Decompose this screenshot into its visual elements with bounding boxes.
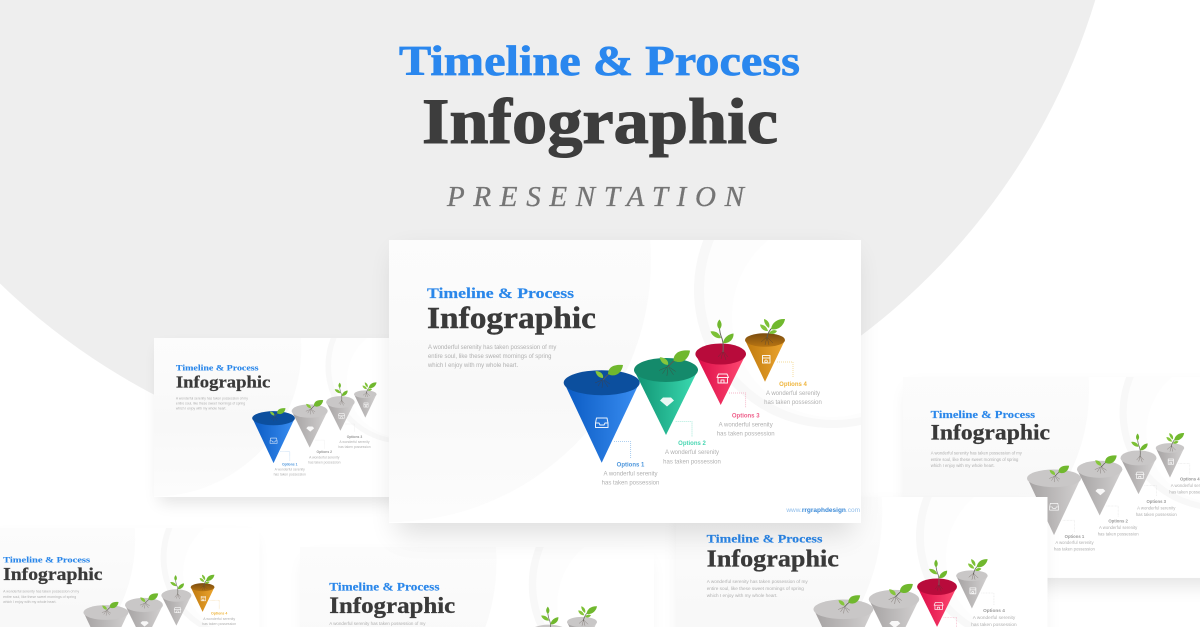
red cone with plant	[695, 320, 746, 405]
option 1 callout: A wonderful serenity	[603, 472, 658, 478]
panel: right slide preview: Timeline & Process	[931, 410, 1035, 421]
panel: left slide preview: A wonderful serenity	[275, 467, 305, 471]
slide shadow	[397, 254, 853, 534]
panel: bottom-right slide preview: Infographic	[707, 546, 839, 572]
orange cone with plant	[745, 319, 785, 382]
panel: left slide preview: Options 2	[317, 450, 332, 454]
slide title: Timeline & Process	[427, 286, 574, 302]
panel: right slide preview: Options 3	[1146, 499, 1167, 504]
panel: bottom-left slide preview: entire soul, like these sweet mornings of spring	[3, 595, 76, 599]
panel: bottom-centre slide preview: A wonderful serenity has taken possession of my	[329, 621, 426, 626]
panel: bottom-left slide preview: Options 4	[211, 611, 227, 615]
panel: right slide preview: A wonderful serenity	[1099, 525, 1138, 530]
panel: left slide preview: has taken possession	[308, 461, 341, 465]
panel: bottom-left slide preview: Timeline & Process	[3, 554, 91, 564]
option 1 callout	[602, 442, 659, 486]
green cone with plant	[634, 350, 698, 435]
slide body text	[427, 345, 556, 369]
option 3 callout: has taken possession	[717, 432, 775, 438]
slide body text: A wonderful serenity has taken possession of my	[428, 345, 556, 351]
panel: bottom-right slide preview	[470, 307, 1133, 627]
option 4 callout: A wonderful serenity	[766, 391, 820, 397]
panel: bottom-centre slide preview: Timeline & Process	[329, 582, 440, 594]
option 4 callout	[764, 362, 822, 406]
panel: left slide preview: Timeline & Process	[176, 363, 259, 373]
slide body text: entire soul, like these sweet mornings of spring	[428, 354, 551, 360]
option 2 callout: Options 2	[678, 441, 706, 447]
slide background	[127, 0, 970, 523]
panel: bottom-left slide preview: Infographic	[3, 564, 103, 584]
panel: left slide preview: A wonderful serenity has taken possession of my	[176, 396, 248, 400]
panel: left slide preview: Options 3	[347, 435, 362, 439]
panel: bottom-left slide preview: A wonderful serenity has taken possession of my	[3, 590, 79, 594]
panel: right slide preview: A wonderful serenity has taken possession of my	[931, 450, 1023, 455]
panel: left slide preview: has taken possession	[274, 472, 306, 476]
panel: left slide preview: Options 1	[282, 462, 298, 466]
subheading: Presentation: PRESENTATION	[446, 181, 746, 213]
heading: Timeline & Process: Timeline & Process	[399, 39, 800, 85]
option 2 callout: A wonderful serenity	[665, 450, 719, 456]
option 3 callout: A wonderful serenity	[719, 422, 773, 428]
panel: bottom-right slide preview: Options 4	[983, 608, 1005, 614]
blue cone with plant	[564, 365, 640, 463]
panel: right slide preview: Options 4	[1180, 477, 1200, 482]
panel: bottom-right slide preview: A wonderful serenity	[973, 615, 1016, 621]
panel: left slide preview: has taken possession	[338, 445, 371, 449]
panel: right slide preview: A wonderful serenity	[1137, 505, 1176, 510]
heading: Infographic: Infographic	[422, 86, 778, 158]
panel: right slide preview: which I enjoy with my whole heart.	[931, 463, 995, 468]
panel: right slide preview: Options 1	[1065, 534, 1085, 539]
website url: www.rrgraphdesign.com	[785, 507, 860, 514]
panel: bottom-centre slide preview: Infographic	[329, 593, 455, 618]
large grey background circle	[0, 0, 1124, 470]
panel: bottom-left slide preview	[0, 385, 324, 627]
option 1 callout: Options 1	[617, 463, 645, 469]
panel: bottom-left slide preview: which I enjoy with my whole heart.	[3, 600, 56, 604]
panel: bottom-right slide preview: A wonderful serenity has taken possession of my	[707, 579, 808, 584]
panel: right slide preview: entire soul, like these sweet mornings of spring	[931, 457, 1019, 462]
panel: main slide preview	[127, 0, 970, 534]
panel: bottom-right slide preview: Timeline & Process	[707, 532, 823, 546]
panel: left slide preview: Infographic	[176, 372, 271, 391]
option 2 callout	[663, 422, 721, 466]
panel: bottom-left slide preview: A wonderful serenity	[203, 617, 235, 621]
slide body text: which I enjoy with my whole heart.	[427, 363, 518, 369]
panel: bottom-right slide preview: which I enjoy with my whole heart.	[707, 593, 778, 598]
panel: left slide preview: which I enjoy with my whole heart.	[176, 406, 226, 410]
panel: right slide preview: has taken possession	[1136, 512, 1177, 517]
option 1 callout: has taken possession	[602, 480, 659, 486]
option 4 callout: Options 4	[779, 382, 807, 388]
option 4 callout: has taken possession	[764, 400, 822, 406]
panel: left slide preview	[7, 202, 481, 503]
panel: left slide preview: entire soul, like these sweet mornings of spring	[176, 401, 245, 405]
panel: right slide preview: has taken possession	[1098, 532, 1139, 537]
option 3 callout	[717, 393, 775, 438]
panel: right slide preview: A wonderful serenity	[1055, 540, 1094, 545]
panel: right slide preview: has taken possession	[1054, 547, 1096, 552]
panel: bottom-centre slide preview	[104, 366, 736, 627]
option 3 callout: Options 3	[732, 414, 760, 420]
slide heading: Infographic	[427, 301, 596, 335]
panel: left slide preview: A wonderful serenity	[309, 455, 340, 459]
panel: right slide preview	[717, 205, 1200, 585]
panel: right slide preview: Infographic	[931, 420, 1050, 444]
panel: right slide preview: Options 2	[1108, 519, 1129, 524]
option 2 callout: has taken possession	[663, 460, 721, 466]
panel: bottom-left slide preview: has taken possession	[202, 622, 236, 626]
panel: left slide preview: A wonderful serenity	[339, 440, 370, 444]
panel: bottom-right slide preview: entire soul, like these sweet mornings of spring	[707, 586, 804, 591]
